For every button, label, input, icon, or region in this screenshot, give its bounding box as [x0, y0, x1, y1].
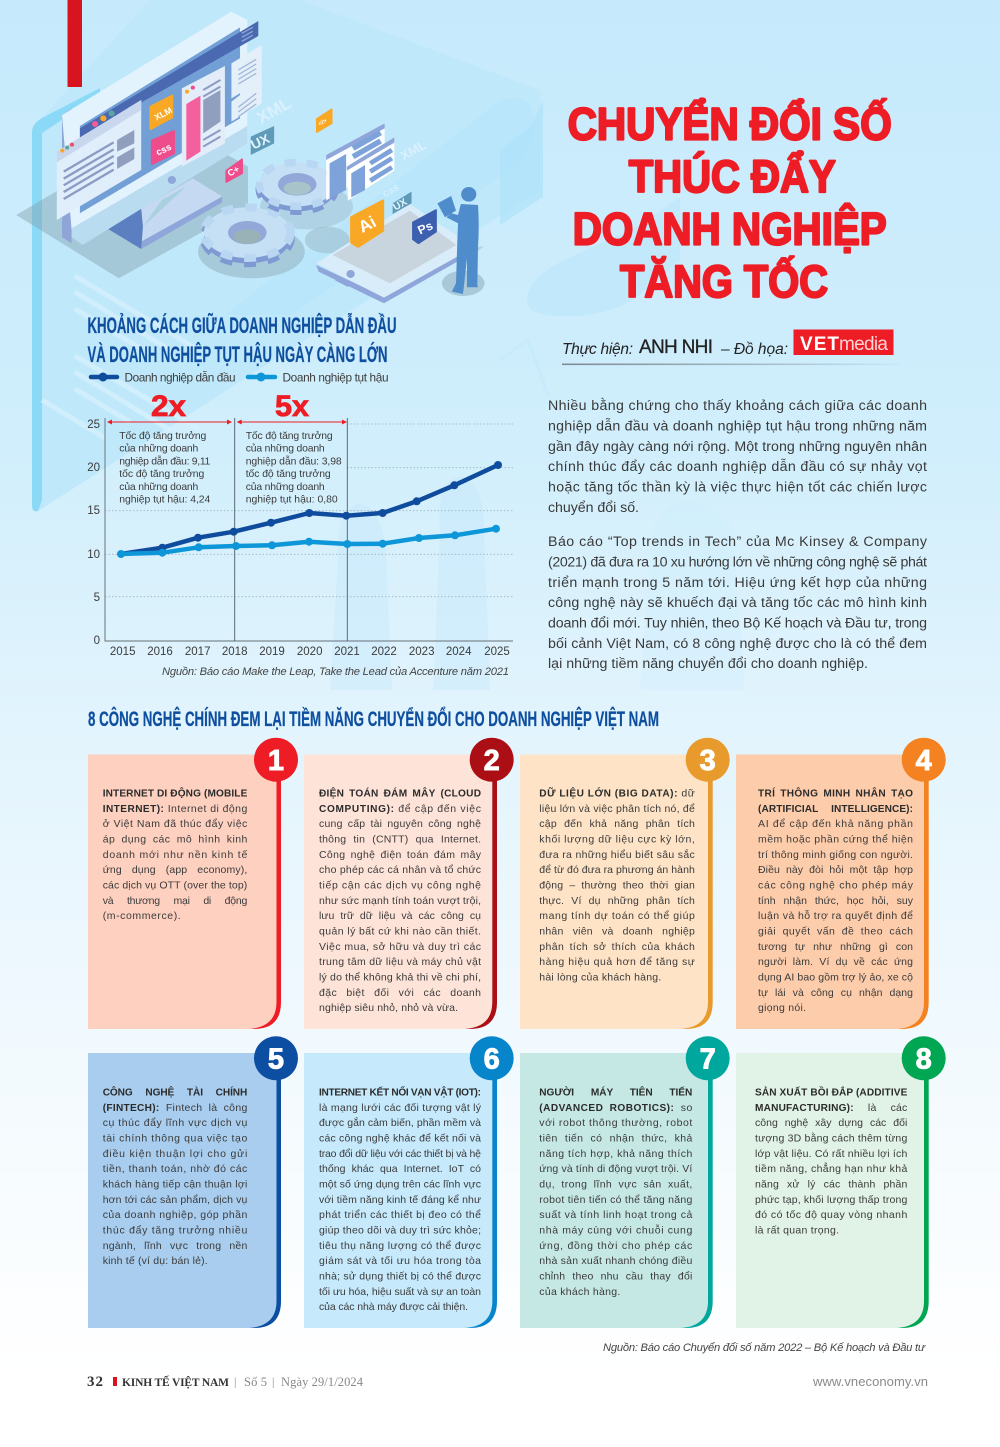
y-axis labels: 20: [87, 462, 100, 474]
logo: VETmedia: VET: [800, 334, 839, 355]
panel 4: artificial intelligence: [736, 738, 946, 1029]
panel 5: fintech: (FINTECH): Fintech là công: [103, 1102, 247, 1114]
icon: UX small tile: [391, 192, 412, 214]
chart legend: Doanh nghiệp tụt hậu: [282, 370, 388, 384]
y-axis labels: 15: [87, 505, 100, 517]
callout: 5x: tốc độ tăng trưởng: [246, 468, 331, 480]
x-axis labels: 2022: [371, 646, 397, 658]
intro paragraph 2: bối cảnh Việt Nam, có 8 công nghệ được cho là có thể đem: [548, 636, 927, 652]
panel 8: additive manufacturing: [736, 1036, 946, 1328]
panel 8: additive manufacturing: lớp vật liệu. Có rất nhiều lợi ích: [755, 1148, 907, 1160]
footer: [87, 1374, 928, 1390]
main title: DOANH NGHIỆP: [573, 204, 887, 254]
panel 2: cloud computing: tiếp cận các dịch vụ công nghệ: [319, 880, 481, 892]
panel 6: internet of things: INTERNET KẾT NỐI VẠN VẬT (IOT):: [319, 1084, 481, 1098]
icon: layered windows: [326, 123, 394, 201]
panel 5: fintech: tiền, thanh toán, nhờ đó các: [103, 1163, 247, 1175]
panel 6: internet of things: phát triển các thiết bị đeo có thể: [319, 1209, 481, 1221]
footer: Ngày 29/1/2024: [281, 1375, 364, 1389]
panel 3: big data: để từ đó đưa ra phương án hành: [539, 864, 695, 876]
series: leading firms: [121, 461, 502, 554]
icon: monitor stand: [107, 178, 222, 249]
icon: Ai tile: Ai: [355, 212, 379, 237]
panel 2: cloud computing: cung cấp tài nguyên công nghệ: [319, 818, 481, 830]
panel 6: internet of things: của các nhà máy được cải thiện.: [319, 1301, 468, 1313]
panel 3: big data: đưa ra những hiểu biết sâu sắc: [539, 848, 695, 861]
callout: 2x: [107, 390, 232, 506]
panel 2: cloud computing: như sức mạnh tính toán vượt trội,: [319, 895, 481, 907]
main title: CHUYỂN ĐỔI SỐ: [568, 98, 892, 150]
logo: VETmedia: media: [839, 334, 888, 355]
panel 4: artificial intelligence: luận và hỗ trợ ra quyết định để: [758, 909, 913, 922]
panel 1: mobile internet: (m-commerce).: [103, 910, 181, 922]
intro paragraph 2: (2021) đã đưa ra 10 xu hướng lớn về những công nghệ sẽ phát: [548, 554, 927, 570]
panel 6: internet of things: 6: [484, 1044, 500, 1076]
byline: ANH NHI: [639, 337, 713, 358]
x-axis labels: 2015: [110, 646, 135, 658]
panel 8: additive manufacturing: năng xử lý các thành phần: [755, 1178, 907, 1190]
callout: 2x: Tốc độ tăng trưởng: [119, 430, 207, 442]
panel 7: advanced robotics: chỉnh theo nhu cầu thay đổi: [539, 1270, 692, 1282]
chart legend: [91, 370, 388, 384]
intro paragraph 2: [548, 534, 928, 672]
byline: Thực hiện:: [562, 341, 633, 358]
panel 3: big data: động – thường theo thời gian: [539, 880, 695, 892]
panel 2: cloud computing: cho phép các cá nhân và tổ chức: [319, 864, 481, 876]
panel 3: big data: cập đến khả năng phân tích: [539, 818, 695, 830]
panel 3: big data: liệu lớn và việc phân tích nó, để: [539, 803, 695, 815]
byline: [562, 330, 894, 358]
floating labels: XML: [253, 94, 295, 127]
panel 4: artificial intelligence: dụng AI bao gồm trợ lý ảo, xe cộ: [758, 972, 913, 984]
panel 2: cloud computing: COMPUTING): để cập đến việc: [319, 803, 481, 815]
byline: – Đồ họa:: [720, 341, 788, 358]
panel 7: advanced robotics: [520, 1036, 730, 1328]
y-axis labels: 10: [87, 549, 100, 561]
panel 8: additive manufacturing: tượng 3D bằng cách thêm từng: [755, 1132, 907, 1144]
callout: 2x: của những doanh: [119, 443, 199, 455]
panel 6: internet of things: giám sát và tối ưu hóa trong tòa: [319, 1255, 481, 1267]
panel 7: advanced robotics: tiên tiến có nhận thức, khả: [539, 1132, 692, 1144]
panel 3: big data: khối lượng dữ liệu cực kỳ lớn,: [539, 834, 695, 846]
icon: XLM tile: XLM: [153, 105, 174, 122]
intro paragraph 1: hoặc tăng tốc thần kỳ là việc thực hiện tốt các chiến lược: [548, 480, 927, 496]
intro paragraph 2: công nghệ này sẽ khuếch đại và tăng tốc các mô hình kinh: [548, 595, 927, 611]
panel 6: internet of things: tiêu thụ năng lượng có thể được: [319, 1240, 481, 1252]
chart heading: [88, 312, 396, 367]
panel 4: artificial intelligence: giải quyết vấn đề theo cách: [758, 926, 913, 938]
panel 1: mobile internet: INTERNET DI ĐỘNG (MOBILE: [103, 786, 248, 800]
y-axis labels: 5: [94, 592, 100, 604]
panel 7: advanced robotics: suất và tính linh hoạt trong cả: [539, 1209, 692, 1221]
panel 2: cloud computing: Việc mua, sở hữu và duy trì các: [319, 941, 481, 953]
x-axis labels: 2024: [446, 646, 472, 658]
x-axis labels: 2016: [147, 646, 173, 658]
panel 1: mobile internet: và thương mại di động: [103, 895, 247, 907]
panel 2: cloud computing: 2: [484, 745, 500, 777]
intro paragraph 1: [548, 397, 927, 516]
panel 2: cloud computing: thông tin (CNTT) qua Internet.: [319, 834, 481, 846]
callout: 5x: nghiệp dẫn đầu: 3,98: [246, 454, 342, 467]
panel 8: additive manufacturing: phức tạp, khối lượng thấp trong: [755, 1194, 907, 1206]
panel 1: mobile internet: INTERNET): Internet di động: [103, 803, 247, 815]
panel 3: big data: nhân viên và doanh nghiệp: [539, 926, 695, 938]
panel 2: cloud computing: Công nghệ điện toán đám mây: [319, 849, 482, 861]
x-axis labels: [110, 646, 510, 658]
panel 5: fintech: 5: [268, 1044, 284, 1076]
panel 8: additive manufacturing: công nghệ xây dựng các đối: [755, 1117, 907, 1129]
panel 5: fintech: CÔNG NGHỆ TÀI CHÍNH: [103, 1086, 247, 1098]
panel 2: cloud computing: đặc biệt đối với các doanh: [319, 987, 481, 999]
panel 5: fintech: kinh tế (ví dụ: bán lẻ).: [103, 1255, 208, 1267]
callout: 2x: nghiệp dẫn đầu: 9,11: [119, 454, 211, 467]
callout: 5x: Tốc độ tăng trưởng: [246, 430, 333, 442]
panel 6: internet of things: tối ưu hóa, hiệu suất và sự an toàn: [319, 1286, 481, 1298]
icon: Ai tile: [351, 201, 383, 247]
panel 7: advanced robotics: (ADVANCED ROBOTICS): so: [539, 1102, 692, 1114]
icon: UX small tile: UX: [391, 197, 410, 213]
panel 1: mobile internet: áp dụng các mô hình kinh: [103, 834, 247, 846]
x-axis labels: 2017: [185, 646, 210, 658]
panel 3: big data: hàng hiệu quả hơn để tăng sự: [539, 956, 695, 968]
intro paragraph 1: chuyển đổi số.: [548, 500, 639, 516]
panel 2: cloud computing: lưu trữ dữ liệu và các công cụ: [319, 910, 481, 922]
intro paragraph 2: triển mạnh trong 5 năm tới. Hiệu ứng kết hợp của những: [548, 575, 927, 591]
panel 2: cloud computing: quản lý bất cứ khi nào cần thiết.: [319, 926, 481, 938]
footer: Số 5: [244, 1375, 267, 1389]
footer: |: [234, 1374, 236, 1388]
panel 6: internet of things: [304, 1036, 514, 1328]
panel 3: big data: phân tích sở thích của khách: [539, 941, 695, 953]
icon: UX tile: UX: [248, 131, 272, 152]
icon: side panels: [231, 45, 262, 122]
panel 6: internet of things: được gắn cảm biến, phần mềm và: [319, 1116, 481, 1129]
panel 1: mobile internet: doanh mới như nền kinh tế: [103, 849, 247, 861]
cards source note: Nguồn: Báo cáo Chuyển đổi số năm 2022 – Bộ Kế hoạch và Đầu tư: [603, 1342, 926, 1354]
footer: www.vneconomy.vn: [812, 1374, 928, 1389]
icon: CSS tile: css: [154, 142, 174, 158]
panel 6: internet of things: trao đổi dữ liệu với các thiết bị và hệ: [319, 1148, 481, 1160]
panel 4: artificial intelligence: tự lái và công cụ nhận dạng: [758, 987, 913, 999]
footer: KINH TẾ VIỆT NAM: [122, 1374, 229, 1389]
panel 2: cloud computing: lý do thể không khả thi về chi phí,: [319, 972, 481, 984]
icon: code window: [57, 100, 141, 220]
panel 7: advanced robotics: của khách hàng.: [539, 1286, 620, 1298]
icon: tall window: [182, 66, 225, 167]
panel 7: advanced robotics: nhà máy cùng với chuỗi cung: [539, 1224, 692, 1236]
series: lagging firms: [117, 525, 500, 558]
icon: gear large: [204, 207, 291, 263]
icon: UX tile: [248, 126, 274, 155]
panel 2: cloud computing: ĐIỆN TOÁN ĐÁM MÂY (CLOUD: [319, 786, 481, 800]
panel 2: cloud computing: nghiệp siêu nhỏ, nhỏ và vừa.: [319, 1002, 458, 1014]
icon: CSS tile: [152, 131, 174, 164]
panel 4: artificial intelligence: tính nhận thức, học hỏi, suy: [758, 895, 914, 907]
icon: monitor: [62, 12, 258, 245]
panel 2: cloud computing: [304, 738, 514, 1029]
panel 1: mobile internet: [88, 738, 298, 1029]
intro paragraph 1: Nhiều bằng chứng cho thấy khoảng cách giữa các doanh: [548, 397, 927, 414]
panel 4: artificial intelligence: mềm hoặc phần cứng thể hiện: [758, 834, 913, 846]
main title: THÚC ĐẨY: [629, 151, 836, 202]
callout: 2x: của những doanh: [119, 481, 199, 493]
panel 4: artificial intelligence: các công nghệ cho phép máy: [758, 880, 914, 892]
panel 8: additive manufacturing: SẢN XUẤT BỒI ĐẮP (ADDITIVE: [755, 1086, 908, 1098]
panel 6: internet of things: với tiềm năng kinh tế đáng kể như: [319, 1194, 481, 1206]
panel 8: additive manufacturing: đó có tốc độ quay vòng nhanh: [755, 1209, 907, 1221]
panel 6: internet of things: nhà; sử dụng thiết bị có thể được: [319, 1270, 481, 1282]
panel 5: fintech: của doanh nghiệp, góp phần: [103, 1209, 247, 1221]
x-axis labels: 2023: [409, 646, 434, 658]
icon: Ps tile: [413, 210, 436, 243]
footer: |: [272, 1374, 274, 1388]
panel 8: additive manufacturing: MANUFACTURING): là các: [755, 1102, 907, 1114]
panel 3: big data: [520, 738, 730, 1029]
main title: [568, 98, 892, 307]
panel 1: mobile internet: ứng dụng (app economy),: [103, 864, 247, 876]
panel 5: fintech: [88, 1036, 298, 1328]
callout: 5x: của những doanh: [246, 481, 325, 493]
callout: 2x: tốc độ tăng trưởng: [119, 468, 205, 480]
panel 4: artificial intelligence: Điều này đòi hỏi một tập hợp: [758, 864, 913, 876]
intro paragraph 1: gần đây ngày càng nới rộng. Một trong những nguyên nhân: [548, 439, 927, 455]
panel 3: big data: DỮ LIỆU LỚN (BIG DATA): dữ: [539, 786, 695, 800]
intro paragraph 2: lại những tiềm năng chuyển đổi cho doanh nghiệp.: [548, 656, 868, 672]
floating labels: [253, 94, 429, 199]
callout: 5x: của những doanh: [246, 443, 325, 455]
x-axis labels: 2025: [484, 646, 510, 658]
panel 4: artificial intelligence: 4: [916, 745, 932, 777]
icon: Ps tile: Ps: [415, 219, 435, 237]
icon: person with tablet: [437, 187, 479, 294]
panel 3: big data: 3: [700, 745, 716, 777]
chart heading: KHOẢNG CÁCH GIỮA DOANH NGHIỆP DẪN ĐẦU: [88, 312, 396, 338]
panel 1: mobile internet: 1: [268, 745, 284, 777]
icon: code tag tile: [317, 109, 332, 132]
x-axis labels: 2018: [222, 646, 247, 658]
callout: 5x: [237, 390, 347, 506]
logo: VETmedia: [794, 330, 894, 355]
panel 5: fintech: ngành, lĩnh vực trong nền: [103, 1240, 247, 1252]
icon: C+ tile: [226, 159, 242, 182]
panel 4: artificial intelligence: người làm. Ví dụ về các ứng: [758, 956, 913, 968]
floating labels: XML: [398, 137, 429, 163]
panel 5: fintech: tài chính thông qua việc tạo: [103, 1132, 247, 1144]
panel 4: artificial intelligence: AI để cập đến khả năng phần: [758, 818, 913, 830]
callout: 5x: nghiệp tụt hậu: 0,80: [246, 494, 338, 506]
icon: gear small: [259, 162, 335, 211]
intro paragraph 2: Báo cáo “Top trends in Tech” của Mc Kinsey & Company: [548, 534, 928, 550]
panel 6: internet of things: các công nghệ khác để kết nối và: [319, 1132, 481, 1144]
panel 2: cloud computing: trung tâm dữ liệu và máy chủ vật: [319, 956, 481, 968]
panel 7: advanced robotics: ứng và tính di động vượt trội. Ví: [539, 1163, 692, 1175]
panel 4: artificial intelligence: giọng nói.: [758, 1002, 806, 1014]
panel 4: artificial intelligence: (ARTIFICIAL INTELLIGENCE):: [758, 804, 913, 815]
icon: C+ tile: C+: [226, 164, 241, 178]
panel 4: artificial intelligence: tương tự như những gì con: [758, 941, 913, 953]
illustration: monitor, gears, phone and person: [16, 12, 485, 303]
section heading: 8 CÔNG NGHỆ CHÍNH ĐEM LẠI TIỀM NĂNG CHUYỂN ĐỔI CHO DOANH NGHIỆP VIỆT NAM: [88, 707, 659, 731]
panel 7: advanced robotics: NGƯỜI MÁY TIÊN TIẾN: [539, 1086, 692, 1098]
y-axis labels: 0: [94, 635, 100, 647]
panel 5: fintech: khách hàng tiếp cận thuận lợi: [103, 1178, 247, 1190]
x-axis labels: 2020: [297, 646, 322, 658]
footer: 32: [87, 1374, 103, 1390]
panel 1: mobile internet: ở Việt Nam đã thúc đẩy việc: [103, 818, 247, 830]
main title: TĂNG TỐC: [620, 256, 828, 307]
panel 8: additive manufacturing: tiềm năng, chẳng hạn như khả: [755, 1162, 907, 1175]
callout: 2x: nghiệp tụt hậu: 4,24: [119, 494, 211, 506]
icon: code tag tile: </>: [317, 117, 329, 128]
panel 7: advanced robotics: năng tích hợp, khả năng thích: [539, 1148, 692, 1160]
x-axis labels: 2021: [334, 646, 360, 658]
panel 5: fintech: cụ thúc đẩy lĩnh vực dịch vụ: [103, 1117, 247, 1129]
panel 6: internet of things: thống khác qua Internet. IoT có: [319, 1163, 481, 1175]
panel 7: advanced robotics: robot tiên tiến có thể tăng năng: [539, 1194, 692, 1206]
intro paragraph 2: doanh đổi mới. Tuy nhiên, theo Bộ Kế hoạch và Đầu tư, trong: [548, 616, 927, 632]
x-axis labels: 2019: [259, 646, 285, 658]
panel 1: mobile internet: các dịch vụ OTT (over the top): [103, 880, 247, 892]
panel 7: advanced robotics: nhà sản xuất nhanh chóng điều: [539, 1255, 692, 1267]
chart heading: VÀ DOANH NGHIỆP TỤT HẬU NGÀY CÀNG LỚN: [88, 342, 388, 367]
panel 6: internet of things: giúp theo dõi và duy trì sức khỏe;: [319, 1224, 481, 1236]
panel 3: big data: hài lòng của khách hàng.: [539, 972, 661, 984]
panel 7: advanced robotics: ứng, đồng thời cho phép các: [539, 1240, 692, 1252]
panel 5: fintech: hơn tới các sản phẩm, dịch vụ: [103, 1194, 247, 1206]
panel 3: big data: thực. Ví dụ những phân tích: [539, 895, 695, 907]
panel 7: advanced robotics: 7: [700, 1044, 716, 1076]
intro paragraph 1: nghiệp dẫn đầu và doanh nghiệp tụt hậu trong những năm: [548, 418, 927, 434]
red header tab: [68, 0, 82, 87]
panel 6: internet of things: một số ứng dụng trên các lĩnh vực: [319, 1178, 481, 1190]
y-axis labels: 25: [87, 419, 100, 431]
panel 4: artificial intelligence: TRÍ THÔNG MINH NHÂN TẠO: [758, 786, 913, 800]
intro paragraph 1: chính thúc đẩy các doanh nghiệp dẫn đầu có sự nhảy vọt: [548, 458, 927, 475]
callout: 5x: 5x: [275, 390, 309, 423]
icon: XLM tile: [151, 96, 174, 129]
panel 6: internet of things: là mạng lưới các đối tượng vật lý: [319, 1102, 482, 1114]
chart legend: Doanh nghiệp dẫn đầu: [124, 370, 236, 384]
chart source: Nguồn: Báo cáo Make the Leap, Take the Lead của Accenture năm 2021: [162, 666, 509, 678]
panel 4: artificial intelligence: trí thông minh giống con người.: [758, 849, 913, 861]
line chart: [87, 390, 513, 658]
callout: 2x: 2x: [151, 390, 186, 423]
panel 5: fintech: thúc đẩy tăng trưởng nhiều: [103, 1224, 247, 1236]
panel 3: big data: mang tính dự toán có thể giúp: [539, 910, 695, 922]
panel 7: advanced robotics: với robot thông thường, robot: [539, 1117, 692, 1129]
panel 5: fintech: điều kiện thuận lợi cho gửi: [103, 1148, 247, 1160]
panel 7: advanced robotics: dụ, trong lĩnh vực sản xuất,: [539, 1178, 692, 1190]
y-axis labels: [87, 419, 100, 647]
panel 8: additive manufacturing: là rất quan trọng.: [755, 1224, 839, 1236]
panel 8: additive manufacturing: 8: [916, 1044, 932, 1076]
floating labels: CSS: [381, 183, 401, 199]
icon: phone: [316, 204, 463, 303]
